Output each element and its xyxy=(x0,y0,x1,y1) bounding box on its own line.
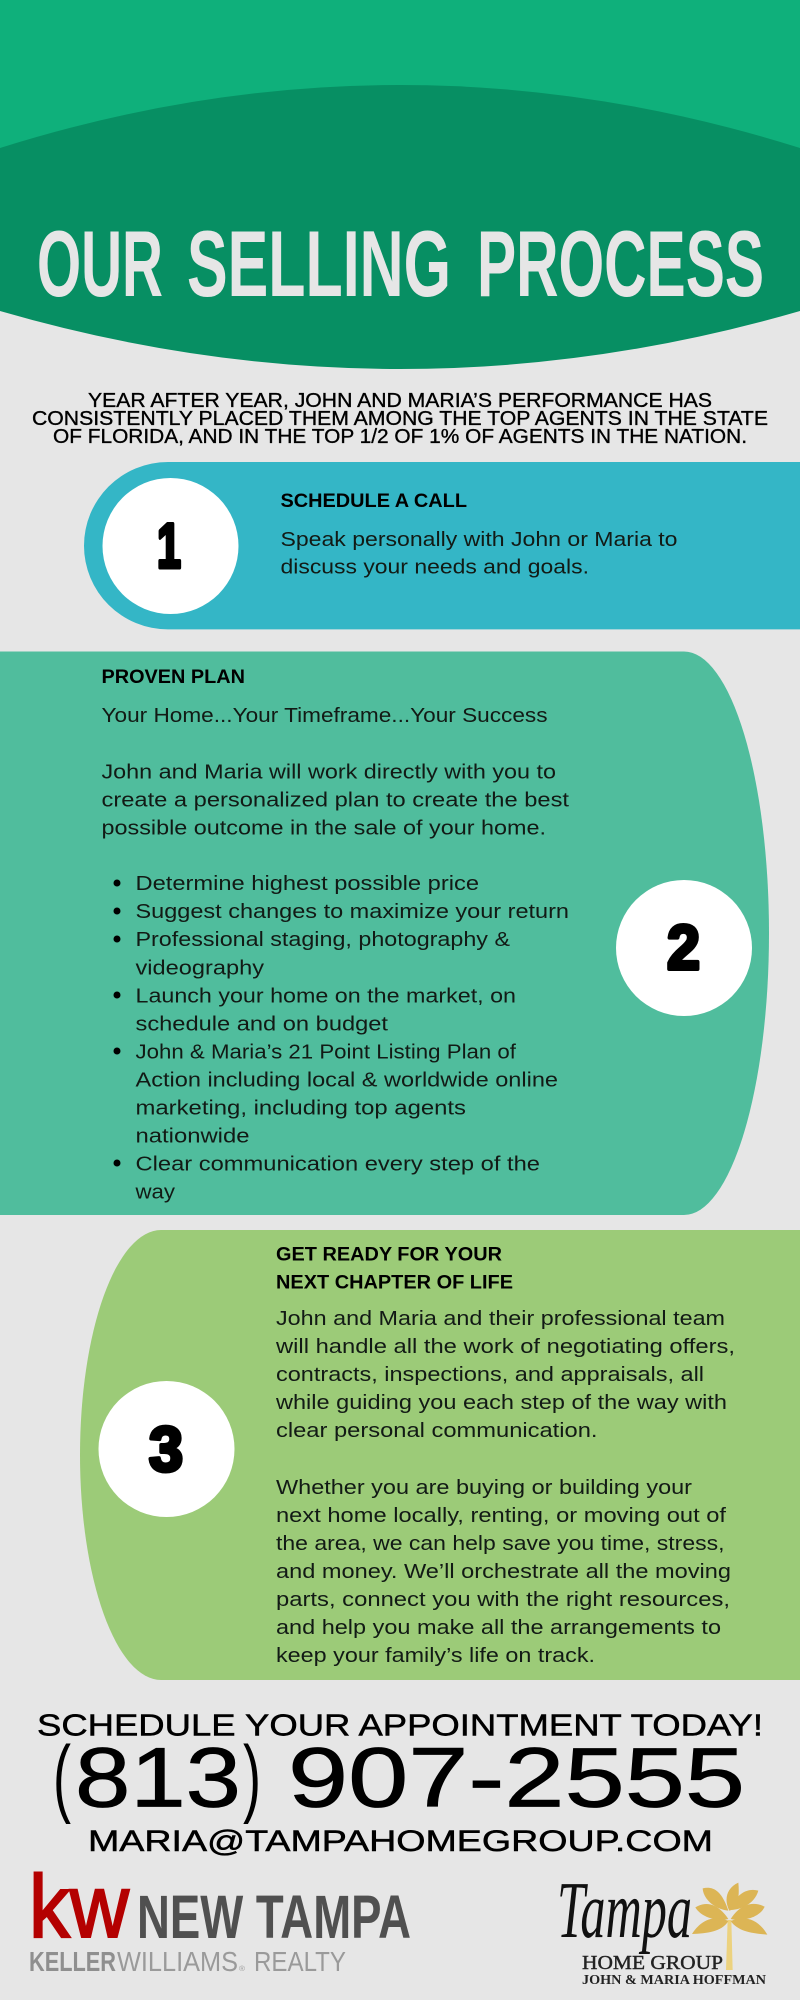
step 2 intro: Your Home...Your Timeframe...Your Success xyxy=(102,705,548,727)
number badge 2 xyxy=(616,880,752,1016)
step 3 paragraph one: contracts, inspections, and appraisals, all xyxy=(276,1364,704,1386)
call to action: SCHEDULE YOUR APPOINTMENT TODAY! xyxy=(37,1708,763,1742)
owners names: JOHN & MARIA HOFFMAN xyxy=(582,1972,766,1987)
step 2 bullet list: videography xyxy=(136,958,264,980)
intro text: OF FLORIDA, AND IN THE TOP 1/2 OF 1% OF AGENTS IN THE NATION. xyxy=(53,426,747,448)
keller williams realty wordmark: WILLIAMS xyxy=(117,1946,238,1977)
phone number: ) xyxy=(243,1729,261,1825)
step 2 bullet list: John & Maria’s 21 Point Listing Plan of xyxy=(136,1042,516,1064)
logo: keller williams new tampa xyxy=(29,1856,411,1977)
phone number: 813 xyxy=(75,1730,241,1824)
step 3 paragraph two: the area, we can help save you time, stress, xyxy=(276,1533,724,1555)
step 3 paragraph one: while guiding you each step of the way with xyxy=(275,1392,727,1414)
step 2 heading: PROVEN PLAN xyxy=(102,666,245,688)
step 3 paragraph two: parts, connect you with the right resources, xyxy=(276,1589,730,1611)
step 2 intro xyxy=(102,705,570,840)
step 2 bullet list: nationwide xyxy=(136,1126,250,1148)
phone number xyxy=(53,1729,745,1825)
header banner xyxy=(0,0,800,369)
step 1 heading: SCHEDULE A CALL xyxy=(280,490,467,512)
step 1 body xyxy=(280,529,678,578)
number badge 3: 3 xyxy=(149,1415,183,1485)
logo: tampa home group xyxy=(557,1867,767,1987)
number badge 1: 1 xyxy=(157,512,181,582)
step 2 bullet list: Suggest changes to maximize your return xyxy=(136,901,569,923)
step 2 bullet list xyxy=(114,873,569,1204)
step 2 bullet list: way xyxy=(134,1182,175,1204)
panel: step 1 schedule a call xyxy=(84,462,800,629)
intro text: YEAR AFTER YEAR, JOHN AND MARIA’S PERFORMANCE HAS xyxy=(88,390,712,412)
step 2 bullet list: Clear communication every step of the xyxy=(136,1154,540,1176)
number badge 1 xyxy=(102,478,238,614)
keller williams realty wordmark xyxy=(29,1946,346,1977)
step 3 heading: GET READY FOR YOUR xyxy=(276,1244,502,1266)
kw mark: kw xyxy=(29,1856,130,1956)
phone number: 907-2555 xyxy=(288,1730,745,1824)
step 2 bullet list: marketing, including top agents xyxy=(136,1098,466,1120)
keller williams realty wordmark: KELLER xyxy=(29,1946,116,1977)
step 2 bullet list: Launch your home on the market, on xyxy=(136,986,516,1008)
step 3 paragraph one xyxy=(275,1308,735,1442)
home group wordmark: HOME GROUP xyxy=(582,1952,723,1974)
step 3 heading xyxy=(276,1244,513,1294)
new tampa wordmark: NEW TAMPA xyxy=(137,1883,411,1952)
step 2 bullet list: schedule and on budget xyxy=(136,1014,389,1036)
title xyxy=(37,211,764,316)
icon: palm tree xyxy=(692,1883,767,1970)
step 3 paragraph one: clear personal communication. xyxy=(276,1420,598,1442)
step 3 paragraph one: John and Maria and their professional team xyxy=(276,1308,725,1330)
number badge 3 xyxy=(98,1381,234,1517)
step 3 paragraph two: and help you make all the arrangements to xyxy=(276,1617,721,1639)
number badge 2: 2 xyxy=(667,913,700,983)
step 3 paragraph two: and money. We’ll orchestrate all the moving xyxy=(276,1561,731,1583)
script wordmark: Tampa xyxy=(557,1867,692,1955)
panel: step 3 next chapter xyxy=(80,1230,800,1680)
step 3 paragraph two: next home locally, renting, or moving out of xyxy=(276,1505,727,1527)
step 3 paragraph two: keep your family’s life on track. xyxy=(276,1645,595,1667)
phone number: ( xyxy=(53,1729,71,1825)
step 2 bullet list: Professional staging, photography & xyxy=(136,929,511,951)
panel: step 2 proven plan xyxy=(0,652,769,1215)
email address: MARIA@TAMPAHOMEGROUP.COM xyxy=(88,1825,713,1858)
intro text: CONSISTENTLY PLACED THEM AMONG THE TOP AGENTS IN THE STATE xyxy=(32,408,768,430)
step 3 paragraph two: Whether you are buying or building your xyxy=(276,1477,692,1499)
step 3 paragraph two xyxy=(276,1477,731,1667)
intro text xyxy=(32,390,768,448)
step 3 heading: NEXT CHAPTER OF LIFE xyxy=(276,1272,513,1294)
step 2 intro: possible outcome in the sale of your home. xyxy=(102,818,546,840)
step 1 body: discuss your needs and goals. xyxy=(280,556,589,578)
step 1 body: Speak personally with John or Maria to xyxy=(280,529,678,551)
title: SELLING xyxy=(187,211,451,316)
step 3 paragraph one: will handle all the work of negotiating offers, xyxy=(275,1336,735,1358)
keller williams realty wordmark: REALTY xyxy=(254,1946,346,1977)
keller williams realty wordmark: ® xyxy=(239,1965,246,1973)
step 2 bullet list: Determine highest possible price xyxy=(136,873,479,895)
step 2 intro: John and Maria will work directly with you to xyxy=(102,762,556,784)
step 2 bullet list: Action including local & worldwide online xyxy=(136,1070,558,1092)
step 2 intro: create a personalized plan to create the best xyxy=(102,790,570,812)
title: OUR xyxy=(37,211,163,316)
